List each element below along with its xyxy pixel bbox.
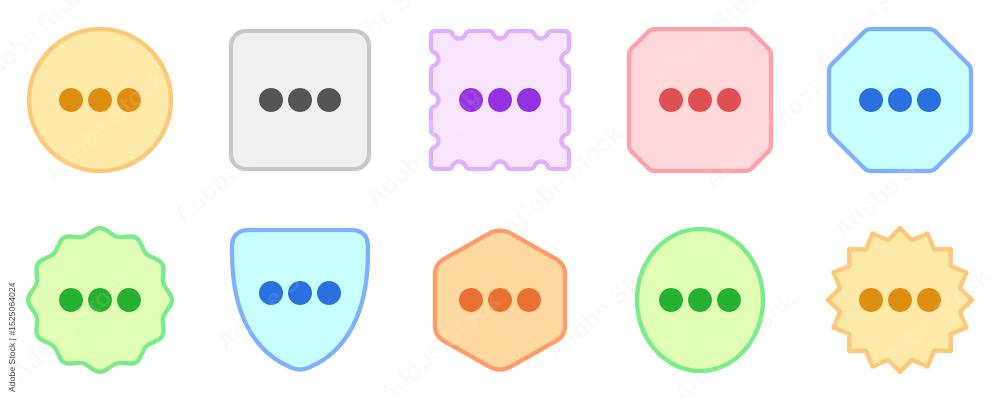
dots: red square: [659, 88, 741, 112]
watermark layer over shapes: Adobe Stock: [419, 21, 551, 145]
watermark layer over shapes: Adobe Stock: [361, 89, 493, 213]
dots: blue octagon: [859, 88, 941, 112]
stock id caption: Adobe Stock | #1525064024: [7, 282, 17, 392]
watermark layer behind shapes: Adobe Stock: [6, 264, 138, 388]
icon: red cut-corner square badge: [629, 29, 771, 171]
dots: yellow starburst: [859, 288, 941, 312]
watermark layer over shapes: Adobe Stock: [829, 121, 961, 245]
watermark layer behind shapes: Adobe Stock: [496, 119, 628, 243]
icon: purple stamp badge: [431, 31, 569, 169]
dots: green wavy: [59, 288, 141, 312]
icon: orange hexagon badge: [435, 230, 565, 370]
watermark layer behind shapes: Adobe Stock: [419, 21, 551, 145]
icon: blue octagon badge: [829, 29, 971, 171]
watermark layer over shapes: Adobe Stock: [864, 261, 996, 385]
watermark layer behind shapes: Adobe Stock: [39, 63, 171, 187]
watermark layer behind shapes: Adobe Stock: [361, 89, 493, 213]
dots: yellow circle: [59, 88, 141, 112]
dots: green oval: [659, 288, 741, 312]
dots: orange hexagon: [459, 288, 541, 312]
icon: yellow starburst badge: [828, 228, 972, 372]
icon: yellow circle badge: [29, 29, 171, 171]
watermark layer behind shapes: Adobe Stock: [169, 106, 301, 230]
watermark layer behind shapes: Adobe Stock: [212, 233, 344, 357]
dots: blue shield: [259, 281, 341, 305]
watermark layer over shapes: Adobe Stock: [212, 233, 344, 357]
watermark layer over shapes: Adobe Stock: [6, 264, 138, 388]
icon: blue shield badge: [232, 230, 368, 370]
watermark layer behind shapes: Adobe Stock: [541, 244, 673, 368]
watermark layer behind shapes: Adobe Stock: [699, 71, 831, 195]
icon: green oval badge: [637, 229, 763, 371]
icon: grey rounded square badge: [231, 31, 369, 169]
watermark layer behind shapes: Adobe Stock: [864, 261, 996, 385]
dots: purple stamp: [459, 88, 541, 112]
icon: green wavy badge: [28, 228, 172, 372]
dots: grey square: [259, 88, 341, 112]
watermark layer over shapes: Adobe Stock: [496, 119, 628, 243]
watermark layer over shapes: Adobe Stock: [169, 106, 301, 230]
watermark layer over shapes: Adobe Stock: [541, 244, 673, 368]
watermark layer behind shapes: Adobe Stock: [829, 121, 961, 245]
watermark layer over shapes: Adobe Stock: [699, 71, 831, 195]
watermark layer over shapes: Adobe Stock: [39, 63, 171, 187]
